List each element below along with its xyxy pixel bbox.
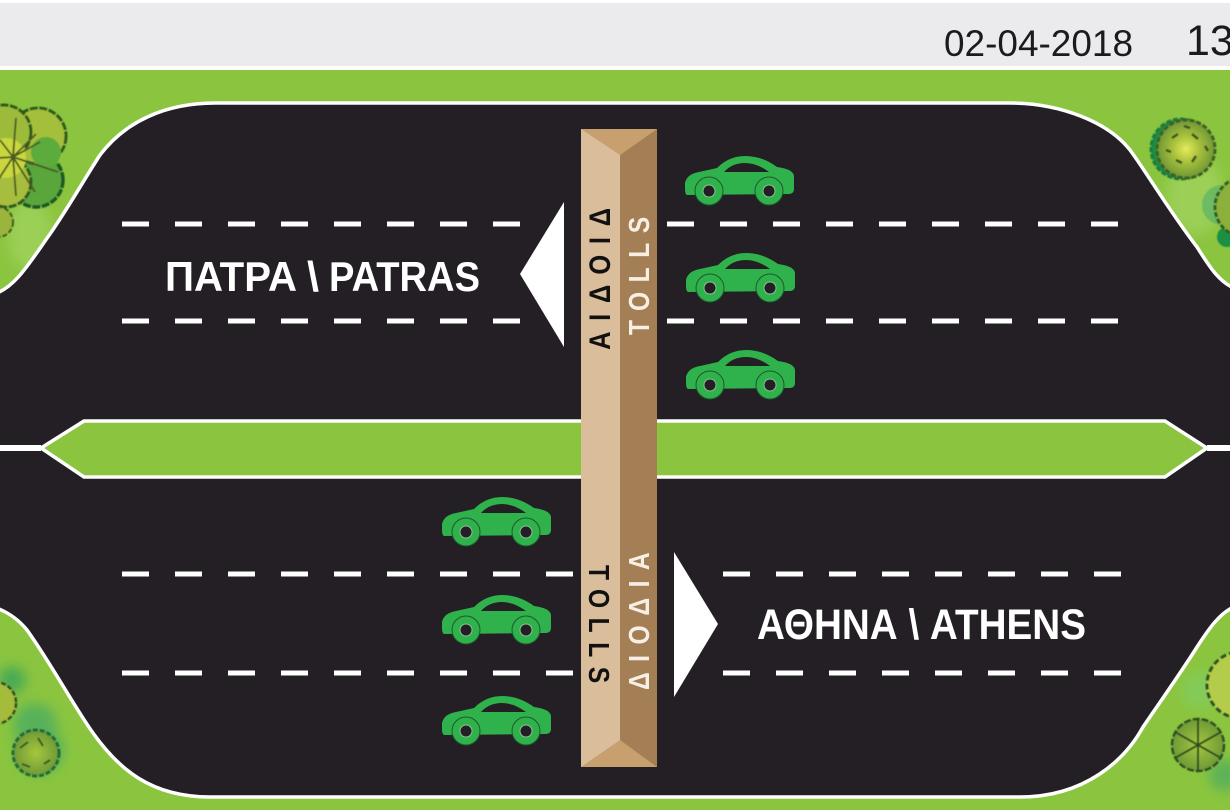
date text: 02-04-2018 [944, 23, 1133, 64]
label: Patras: ΠΑΤΡΑ [165, 253, 297, 300]
gantry bottom cap [581, 740, 657, 767]
car: lower lane 1 [442, 497, 551, 546]
car: lower lane 3 [442, 696, 551, 745]
car: upper lane 1 [685, 156, 794, 205]
gantry top cap [581, 129, 657, 155]
foliage wash: bottom left [0, 666, 64, 774]
lane dashes: upper carriageway [122, 224, 1118, 321]
gantry left face [581, 129, 620, 767]
header bar [0, 0, 1230, 70]
tree: top right [1151, 119, 1215, 179]
toll gantry [581, 129, 657, 767]
lower gantry text: English: TOLLS [583, 565, 615, 683]
tree: bottom left [0, 682, 59, 776]
tree: top left large [0, 105, 66, 237]
lower gantry text: Greek: ΔΙΟΔΙΑ [623, 552, 655, 690]
median strip [0, 421, 1230, 477]
foliage wash: top corners [8, 155, 1223, 270]
car: upper lane 3 [686, 350, 795, 399]
lane dashes: lower carriageway [122, 574, 1121, 673]
car: upper lane 2 [686, 253, 795, 302]
label: Patras [165, 253, 480, 300]
label: Patras: PATRAS [329, 253, 480, 300]
foliage wash: bottom right [1182, 672, 1230, 791]
upper gantry text: English: TOLLS [623, 217, 655, 335]
label: Athens: ΑΘΗΝΑ \ ATHENS [757, 601, 1086, 649]
tree: bottom right [1172, 652, 1230, 771]
direction arrow: right [674, 552, 718, 697]
car: lower lane 2 [442, 595, 551, 644]
tree: right edge upper [1202, 177, 1230, 247]
gantry right face [620, 129, 657, 767]
direction arrow: left [520, 202, 564, 347]
label: Patras: \ [307, 253, 319, 300]
upper gantry text: Greek: ΔΙΟΔΙΑ [583, 208, 616, 350]
